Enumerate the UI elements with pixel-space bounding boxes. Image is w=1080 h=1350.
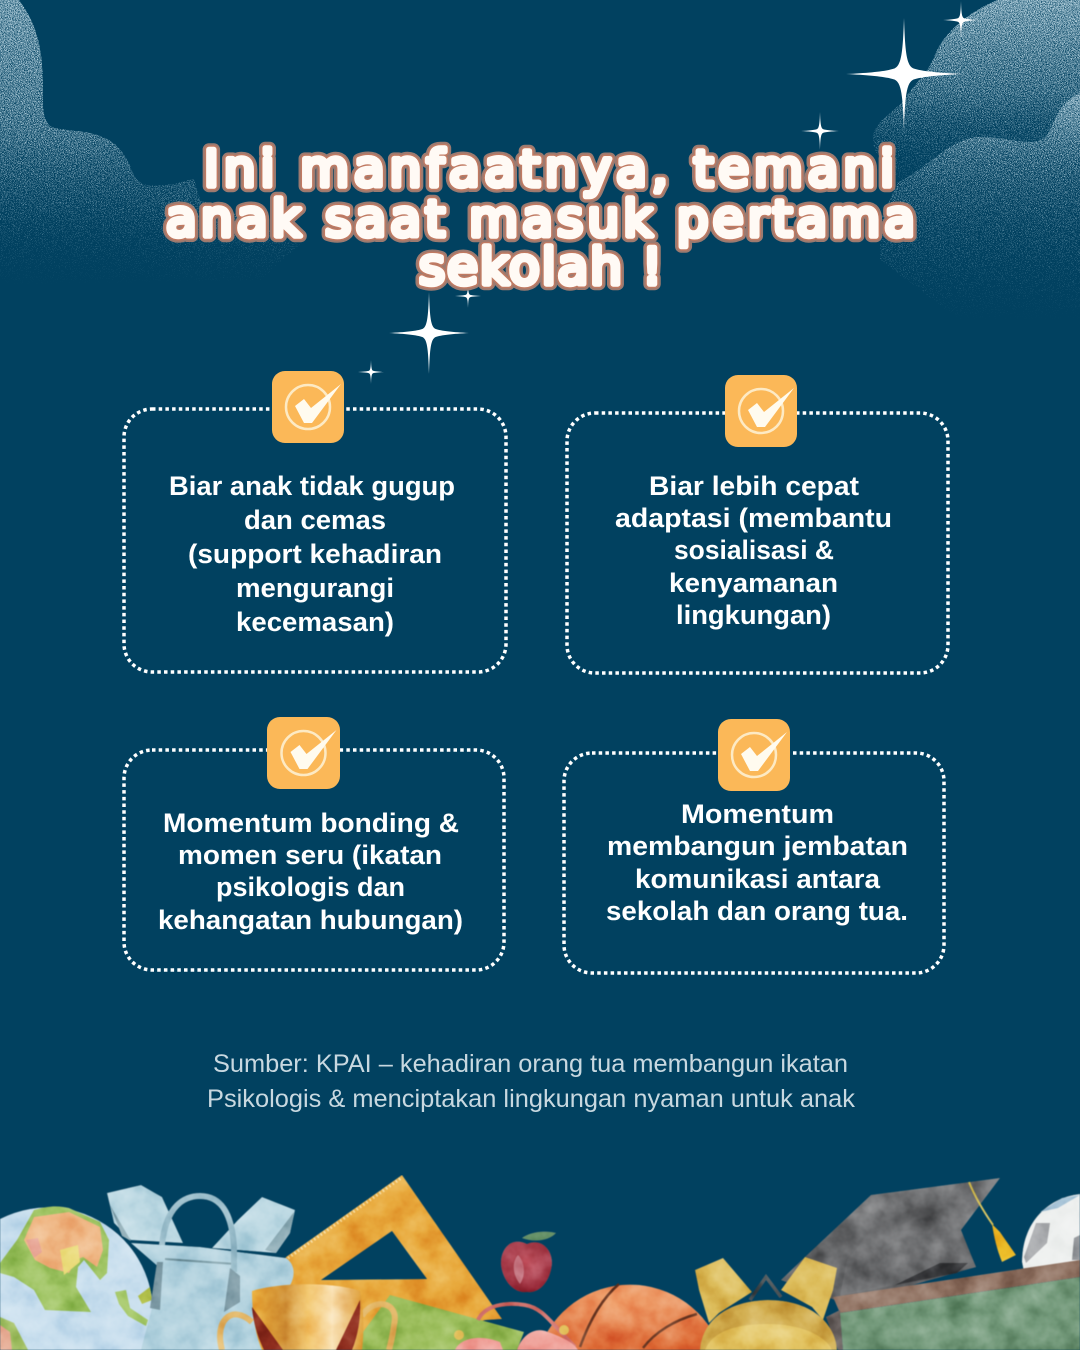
title: Ini manfaatnya, temani: [204, 140, 894, 198]
star: top right small: [943, 1, 979, 39]
icon: blue backpack: [107, 1185, 300, 1350]
icon: check badge: [725, 375, 797, 447]
source note: Psikologis & menciptakan lingkungan nyaman untuk anak: [207, 1085, 856, 1113]
icon: set square: [270, 1175, 502, 1345]
title: anak saat masuk pertama: [166, 190, 915, 248]
icon: pink glasses: [454, 1304, 578, 1350]
dotted frame: [564, 753, 944, 973]
text: benefit three: kehangatan hubungan): [158, 905, 463, 935]
panel: bottom right benefit: [564, 719, 944, 973]
text: benefit two: Biar lebih cepat: [649, 471, 859, 501]
text: benefit one: [169, 471, 455, 637]
icon: check badge: [718, 719, 790, 791]
dotted frame: [124, 409, 506, 672]
title: anak saat masuk pertama: [166, 190, 915, 248]
icon: graduation cap: [781, 1178, 1016, 1300]
title: sekolah !: [419, 238, 662, 296]
title: [166, 140, 915, 296]
star: below title large: [389, 292, 469, 374]
cloud: top left: [0, 0, 300, 285]
text: benefit two: [615, 471, 892, 630]
text: benefit two: sosialisasi &: [674, 535, 834, 565]
text: benefit three: psikologis dan: [216, 872, 405, 902]
text: benefit one: (support kehadiran: [188, 539, 442, 569]
text: benefit four: sekolah dan orang tua.: [606, 896, 908, 926]
text: benefit two: lingkungan): [676, 600, 831, 630]
title: anak saat masuk pertama: [166, 190, 915, 248]
panel: top right benefit: [567, 375, 948, 673]
panel: top left benefit: [124, 371, 506, 672]
star: above title: [801, 112, 839, 150]
text: benefit three: [158, 808, 463, 935]
text: benefit one: mengurangi: [236, 573, 394, 603]
text: benefit four: membangun jembatan: [607, 831, 908, 861]
cloud: top right back lobe: [873, 0, 1080, 182]
text: benefit three: Momentum bonding &: [163, 808, 459, 838]
panel: bottom left benefit: [124, 717, 504, 970]
text: benefit two: kenyamanan: [669, 568, 838, 598]
star: below title small left: [358, 360, 384, 384]
title: Ini manfaatnya, temani: [204, 140, 894, 198]
text: benefit two: adaptasi (membantu: [615, 503, 892, 533]
icon: trophy: [220, 1284, 395, 1350]
star: large top right: [846, 18, 962, 130]
source note: [207, 1050, 856, 1113]
icon: green paper: [350, 1295, 524, 1350]
title: sekolah !: [419, 238, 662, 296]
text: benefit one: dan cemas: [244, 505, 386, 535]
cloud: top right front lobe: [880, 93, 1080, 320]
icon: basketball: [539, 1284, 721, 1350]
text: benefit four: komunikasi antara: [635, 864, 881, 894]
text: benefit one: kecemasan): [236, 607, 394, 637]
icon: chalkboard: [826, 1260, 1080, 1350]
source note: Sumber: KPAI – kehadiran orang tua membangun ikatan: [213, 1050, 848, 1078]
icon: apple: [501, 1232, 556, 1292]
icon: soccer ball: [1022, 1194, 1080, 1272]
dotted frame: [567, 413, 948, 673]
text: benefit four: Momentum: [681, 799, 834, 829]
title: Ini manfaatnya, temani: [204, 140, 894, 198]
icon: check badge: [272, 371, 344, 443]
star: below title small right: [455, 284, 481, 308]
icon: check badge: [267, 717, 340, 789]
illustration: school items: [0, 1175, 1080, 1350]
text: benefit one: Biar anak tidak gugup: [169, 471, 455, 501]
title: sekolah !: [419, 238, 662, 296]
dotted frame: [124, 750, 504, 970]
icon: globe: [0, 1206, 153, 1350]
text: benefit four: [606, 799, 908, 926]
text: benefit three: momen seru (ikatan: [178, 840, 442, 870]
icon: yellow backpack: [695, 1257, 837, 1350]
